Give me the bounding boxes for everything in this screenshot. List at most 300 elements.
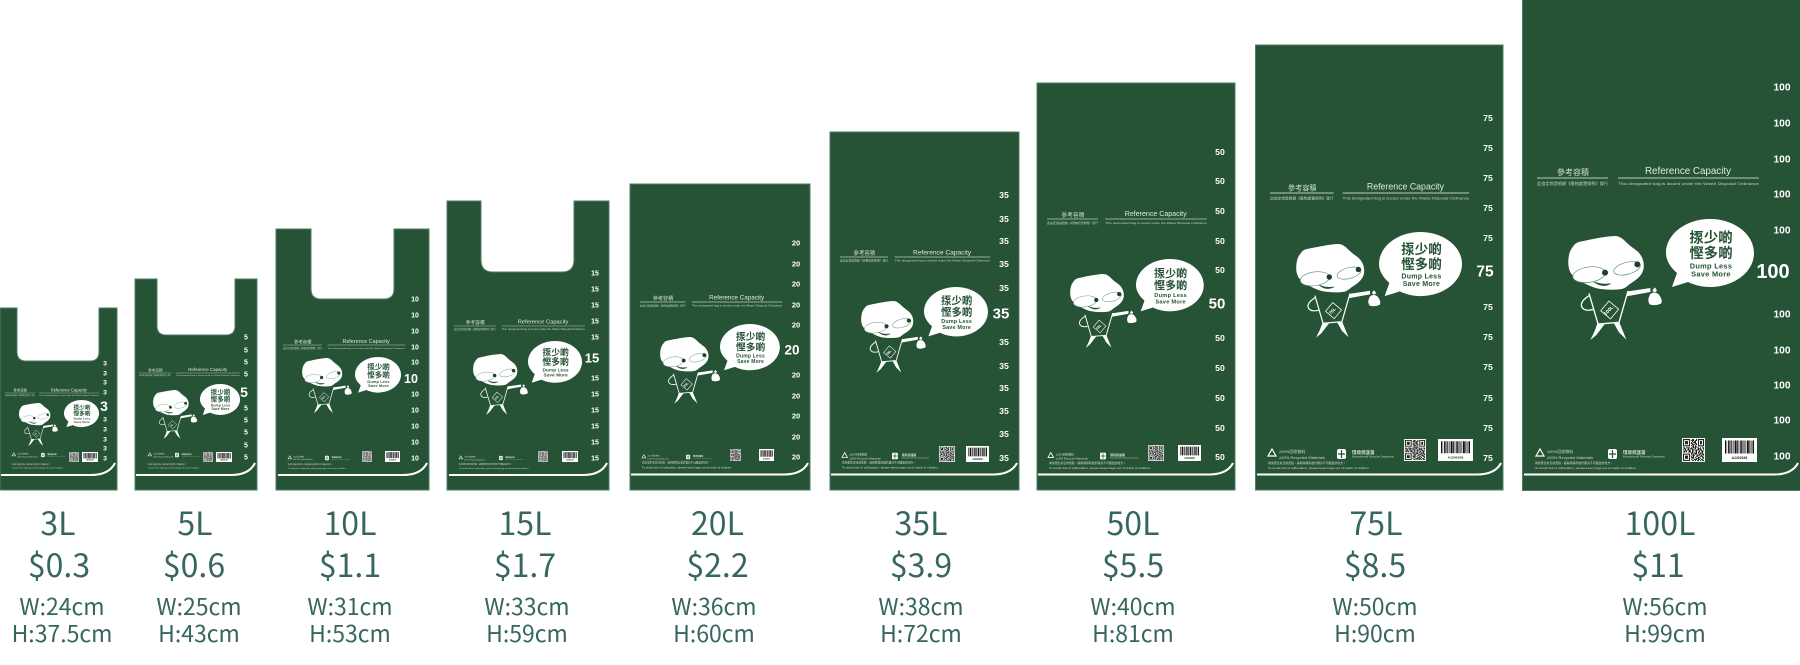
capacity numbers: 100 [1774,416,1791,426]
capacity numbers: 50 [1215,206,1225,216]
reference capacity heading [5,387,99,397]
recycled materials mark: ≥20%回收物料 [293,455,305,459]
recycled materials mark: ≥20%回收物料 [1056,452,1074,456]
speech bubble [1666,219,1754,287]
reference capacity heading: 此指定袋是根據《廢物處置條例》發行 [139,373,172,377]
reference capacity heading: 參考容積 [1288,183,1317,192]
barcode [1438,439,1473,461]
capacity numbers: 100 [1774,226,1791,236]
capacity numbers: 50 [1215,176,1225,186]
suffocation warning: 為免發生窒息的危險，請將膠袋存放於嬰兒不可觸及的地方。 [1268,460,1346,465]
recycled materials mark [288,455,313,461]
label: 20L size and price: 20L [691,499,744,545]
recycled materials mark: ≥20% Recycled Materials [849,456,881,460]
suffocation warning [288,462,347,470]
reference capacity heading: This designated bag is issued under the Waste Disposal Ordinance [1343,196,1469,200]
capacity numbers: 15 [591,334,599,342]
capacity numbers [404,296,419,462]
capacity numbers: 20 [792,452,800,462]
speech bubble: 慳多啲 [736,341,765,354]
capacity numbers: 15 [591,424,599,430]
barcode: A1202106 [1732,456,1747,460]
QR code [730,449,741,461]
QR code [362,451,372,462]
suffocation warning: To avoid risk of suffocation, please keep bags out of reach of children. [459,467,530,470]
bag body [830,132,1019,490]
label: 50L size and price: $5.5 [1102,541,1164,587]
EPD logo: 環境保護署 [1623,449,1646,456]
reference capacity heading: 參考容積 [653,295,673,302]
speech bubble [64,400,99,427]
reference capacity heading: 此指定袋是根據《廢物處置條例》發行 [1270,195,1334,200]
capacity numbers: 5 [244,454,248,462]
label: 10L size and price [307,499,393,649]
speech bubble: Save More [942,325,971,331]
capacity numbers: 10 [411,408,419,414]
barcode: A1202106 [389,459,396,462]
QR code [1682,438,1705,462]
barcode [1178,445,1201,461]
bottom curve [1,463,115,475]
panel: 15L bag [447,201,609,490]
bag body [0,308,117,490]
label: 10L size and price: H:53cm [309,615,391,649]
capacity numbers: 15 [591,318,599,326]
barcode: A1202106 [220,459,228,462]
capacity numbers: 35 [999,337,1009,347]
mascot character: 20L [683,381,689,388]
capacity numbers: 75 [1483,302,1493,312]
speech bubble: Save More [1403,281,1440,288]
capacity numbers: 100 [1774,346,1791,356]
recycled materials mark: ≥20% Recycled Materials [17,455,38,458]
mascot character [1070,274,1137,348]
EPD logo: Environmental Protection Department [1110,456,1139,459]
speech bubble: Dump Less [543,367,569,372]
label: 75L size and price: H:90cm [1334,615,1416,649]
speech bubble: 揼少啲 [1689,228,1733,246]
label: 15L size and price: 15L [499,499,551,545]
reference capacity heading [139,367,240,377]
speech bubble: 慳多啲 [1154,278,1187,292]
capacity numbers: 3 [103,426,107,434]
capacity numbers: 100 [1774,190,1791,200]
EPD logo: Environmental Protection Department [505,458,524,461]
speech bubble: Dump Less [211,404,230,408]
capacity numbers: 20 [792,432,800,442]
recycled materials mark [148,452,174,458]
suffocation warning: 為免發生窒息的危險，請將膠袋存放於嬰兒不可觸及的地方。 [459,462,513,466]
EPD logo: Environmental Protection Department [902,456,930,459]
capacity numbers: 75 [1483,423,1493,433]
reference capacity heading [454,319,586,331]
recycled materials mark: ≥20%回收物料 [153,452,165,456]
capacity numbers: 3 [103,416,107,424]
capacity numbers: 10 [411,456,419,462]
capacity numbers: 75 [1483,143,1493,153]
speech bubble: 揼少啲 [736,330,765,343]
bottom curve [1038,463,1233,474]
capacity numbers: 75 [1483,393,1493,403]
capacity numbers: 100 [1756,261,1790,283]
panel: 3L bag [0,308,117,490]
recycled materials mark [1268,448,1325,460]
capacity numbers: 20 [784,342,800,358]
reference capacity heading: 此指定袋是根據《廢物處置條例》發行 [5,394,35,397]
recycled materials mark: ≥20% Recycled Materials [153,455,174,458]
EPD logo: 環境保護署 [47,452,57,456]
suffocation warning: To avoid risk of suffocation, please keep bags out of reach of children. [642,466,732,470]
label: 50L size and price: H:81cm [1092,615,1174,649]
capacity numbers [1756,82,1791,462]
reference capacity heading: This designated bag is issued under the Waste Disposal Ordinance [502,328,586,331]
reference capacity heading: 參考容積 [13,388,28,393]
label: 20L size and price: $2.2 [686,541,749,587]
capacity numbers: 35 [999,453,1009,463]
label: 5L size and price: $0.6 [163,541,225,587]
label: 5L size and price: W:25cm [156,588,242,622]
suffocation warning: 為免發生窒息的危險，請將膠袋存放於嬰兒不可觸及的地方。 [1535,460,1613,465]
label: 20L size and price [671,499,757,649]
speech bubble [924,287,988,336]
label: 35L size and price: H:72cm [880,615,962,649]
recycled materials mark [459,455,485,461]
capacity numbers: 75 [1483,453,1493,463]
bag body [1037,83,1235,490]
recycled materials mark [12,452,38,458]
QR code [1148,445,1164,461]
capacity numbers: 10 [411,360,419,366]
mascot character [861,301,926,373]
reference capacity heading: Reference Capacity [188,367,228,372]
mascot character [19,403,58,446]
speech bubble [355,357,401,393]
reference capacity heading: Reference Capacity [518,320,569,326]
EPD logo: Environmental Protection Department [693,457,713,460]
capacity numbers: 75 [1483,362,1493,372]
label: 35L size and price: $3.9 [890,541,952,587]
label: 75L size and price [1332,499,1418,649]
reference capacity heading: This designated bag is issued under the Waste Disposal Ordinance [1618,181,1760,186]
panel: 35L bag [830,132,1019,490]
speech bubble: 慳多啲 [367,369,390,379]
speech bubble: Dump Less [73,417,91,421]
capacity numbers: 20 [792,412,800,420]
capacity numbers [784,238,800,462]
capacity numbers: 20 [792,300,800,310]
label: 3L size and price: H:37.5cm [12,615,112,649]
reference capacity heading: Reference Capacity [913,249,972,256]
capacity numbers [1476,113,1494,463]
label: 5L size and price: 5L [177,499,213,545]
bottom curve [1524,463,1798,474]
capacity numbers: 15 [591,440,599,446]
capacity numbers: 75 [1483,203,1493,213]
EPD logo: Environmental Protection Department [182,455,201,458]
capacity numbers [993,190,1009,463]
suffocation warning [842,460,939,470]
reference capacity heading [1270,181,1469,200]
barcode [1722,438,1757,462]
bag body [447,201,609,490]
mascot character: 75L [1328,306,1337,316]
panel: 20L bag [630,184,810,490]
capacity numbers: 15 [591,408,599,414]
capacity numbers [1209,147,1225,462]
recycled materials mark: ≥20% Recycled Materials [293,458,313,461]
EPD logo: Environmental Protection Department [1623,456,1665,459]
capacity numbers: 20 [792,260,800,268]
panel: 10L bag [276,229,429,490]
EPD logo: 環境保護署 [332,455,341,459]
barcode: A1202106 [566,459,574,462]
bag body [276,229,429,490]
barcode: A1202106 [1448,455,1464,459]
suffocation warning: 為免發生窒息的危險，請將膠袋存放於嬰兒不可觸及的地方。 [148,463,187,466]
recycled materials mark: ≥20%回收物料 [647,454,660,458]
speech bubble: 揼少啲 [542,346,569,357]
reference capacity heading: 參考容積 [1061,211,1085,219]
recycled materials mark: ≥20%回收物料 [17,452,29,456]
panel: 50L bag [1037,83,1235,490]
suffocation warning: To avoid risk of suffocation, please keep bags out of reach of children. [148,466,200,469]
EPD logo [686,454,713,460]
EPD logo: 環境保護署 [505,455,515,459]
capacity numbers: 50 [1215,236,1225,246]
label: 50L size and price [1090,499,1176,649]
reference capacity heading [283,338,406,350]
label: 20L size and price: W:36cm [671,588,757,622]
EPD logo [41,452,66,458]
reference capacity heading: 參考容積 [148,368,163,373]
speech bubble: Save More [1691,270,1731,278]
bottom curve [278,463,427,475]
speech bubble: 慳多啲 [211,395,231,404]
suffocation warning [12,463,64,469]
suffocation warning [1268,460,1370,470]
speech bubble: 慳多啲 [1401,256,1442,272]
label: 75L size and price: 75L [1350,499,1402,545]
capacity numbers: 100 [1774,154,1791,166]
panel: 100L bag [1522,0,1800,490]
suffocation warning: To avoid risk of suffocation, please keep bags out of reach of children. [12,466,64,469]
capacity numbers: 15 [591,270,599,278]
reference capacity heading: 此指定袋是根據《廢物處置條例》發行 [454,327,497,331]
speech bubble: 慳多啲 [73,410,91,418]
bottom curve [831,463,1017,474]
capacity numbers: 3 [103,390,107,396]
speech bubble: Save More [368,383,390,388]
suffocation warning: 為免發生窒息的危險，請將膠袋存放於嬰兒不可觸及的地方。 [1049,460,1126,465]
barcode [385,451,400,462]
recycled materials mark: ≥20%回收物料 [1547,448,1573,454]
capacity numbers: 75 [1483,332,1493,342]
capacity numbers: 100 [1774,310,1791,320]
speech bubble: Dump Less [1401,274,1441,281]
capacity numbers: 50 [1209,296,1225,312]
QR code [939,446,955,462]
label: 100L size and price: W:56cm [1622,588,1708,622]
EPD logo [499,455,524,461]
capacity numbers: 3 [103,370,107,378]
label: 10L size and price: $1.1 [319,541,381,587]
speech bubble: Dump Less [1690,262,1732,270]
label: 50L size and price: W:40cm [1090,588,1176,622]
capacity numbers: 100 [1774,118,1791,130]
barcode [562,451,578,462]
reference capacity heading: This designated bag is issued under the Waste Disposal Ordinance [39,394,99,397]
capacity numbers: 10 [404,372,418,386]
bag body [1256,45,1503,490]
QR code [69,452,79,462]
label: 15L size and price: W:33cm [484,588,570,622]
EPD logo [325,455,351,461]
label: 100L size and price: $11 [1631,541,1685,587]
QR code [1404,439,1426,461]
speech bubble [1379,232,1462,296]
capacity numbers: 35 [999,406,1009,416]
suffocation warning [642,460,732,470]
reference capacity heading: Reference Capacity [1645,166,1731,177]
reference capacity heading [1537,166,1760,186]
speech bubble: 慳多啲 [542,356,569,367]
capacity numbers: 50 [1215,147,1225,157]
capacity numbers: 35 [999,259,1009,269]
speech bubble [1136,259,1204,311]
capacity numbers: 35 [993,306,1009,322]
capacity numbers: 75 [1476,264,1494,280]
reference capacity heading: This designated bag is issued under the Waste Disposal Ordinance [895,259,991,263]
capacity numbers: 75 [1483,173,1493,183]
label: 100L size and price [1622,499,1708,649]
label: 15L size and price: $1.7 [494,541,556,587]
suffocation warning: To avoid risk of suffocation, please keep bags out of reach of children. [842,466,939,470]
capacity numbers: 50 [1215,423,1225,433]
reference capacity heading: This designated bag is issued under the Waste Disposal Ordinance [328,347,406,350]
speech bubble [720,324,780,370]
recycled materials mark: ≥20% Recycled Materials [1279,455,1325,460]
capacity numbers: 5 [244,372,248,378]
capacity numbers: 10 [411,296,419,304]
label: 10L size and price: W:31cm [307,588,393,622]
EPD logo: 環境保護署 [1352,449,1375,456]
reference capacity heading: 此指定袋是根據《廢物處置條例》發行 [640,303,686,307]
capacity numbers: 100 [1774,452,1791,462]
capacity numbers: 50 [1215,363,1225,373]
recycled materials mark [1536,448,1593,460]
mascot character [153,390,197,439]
capacity numbers: 15 [591,302,599,310]
label: 3L size and price: 3L [40,499,76,545]
EPD logo [892,452,930,459]
EPD logo: 環境保護署 [1110,452,1125,457]
capacity numbers: 35 [999,429,1009,439]
capacity numbers: 75 [1483,113,1493,123]
label: 75L size and price: W:50cm [1332,588,1418,622]
recycled materials mark: ≥20%回收物料 [464,455,476,459]
EPD logo: Environmental Protection Department [1352,456,1394,459]
capacity numbers: 5 [244,348,248,354]
capacity numbers [100,360,108,462]
EPD logo [1337,449,1394,459]
capacity numbers: 10 [411,344,419,352]
reference capacity heading: 此指定袋是根據《廢物處置條例》發行 [1047,220,1098,225]
capacity numbers: 20 [792,280,800,288]
mascot character [473,354,528,415]
suffocation warning: 為免發生窒息的危險，請將膠袋存放於嬰兒不可觸及的地方。 [12,463,51,466]
suffocation warning: 為免發生窒息的危險，請將膠袋存放於嬰兒不可觸及的地方。 [842,460,916,464]
capacity numbers: 3 [103,380,107,386]
bag body [630,184,810,490]
panel: 75L bag [1256,45,1503,490]
label: 100L size and price: 100L [1625,499,1695,545]
capacity numbers: 100 [1774,380,1791,392]
label: 10L size and price: 10L [324,499,376,545]
capacity numbers: 35 [999,214,1009,224]
reference capacity heading: Reference Capacity [1367,181,1445,191]
suffocation warning: To avoid risk of suffocation, please keep bags out of reach of children. [1049,466,1151,470]
label: 15L size and price [484,499,570,649]
capacity numbers: 20 [792,320,800,330]
mascot character [1296,244,1380,338]
panel: 5L bag [135,279,257,490]
speech bubble: 慳多啲 [941,305,972,318]
label: 3L size and price: W:24cm [19,588,105,622]
mascot character: 5L [171,423,175,427]
mascot character: 35L [886,349,893,356]
barcode [216,452,232,462]
mascot character: 10L [320,394,327,400]
speech bubble: Save More [543,372,568,377]
capacity numbers: 3 [103,436,107,444]
speech bubble: Save More [1155,299,1186,305]
capacity numbers: 5 [244,418,248,424]
capacity numbers: 10 [411,392,419,398]
suffocation warning: To avoid risk of suffocation, please keep bags out of reach of children. [1535,466,1637,470]
capacity numbers: 20 [792,392,800,400]
capacity numbers: 35 [999,190,1009,200]
speech bubble: Dump Less [367,379,390,384]
QR code [538,451,548,462]
EPD logo [1100,452,1139,459]
capacity numbers: 10 [411,312,419,320]
reference capacity heading [840,249,991,263]
recycled materials mark [842,452,881,460]
label: 75L size and price: $8.5 [1344,541,1406,587]
capacity numbers: 15 [591,392,599,398]
barcode: A1202106 [1184,457,1195,460]
reference capacity heading: 參考容積 [1557,167,1589,177]
capacity numbers [585,270,599,462]
reference capacity heading: This designated bag is issued under the Waste Disposal Ordinance [692,303,783,307]
capacity numbers: 5 [244,442,248,450]
reference capacity heading: 此指定袋是根據《廢物處置條例》發行 [283,346,323,350]
label: 3L size and price [12,499,112,649]
label: 50L size and price: 50L [1107,499,1159,545]
suffocation warning: 為免發生窒息的危險，請將膠袋存放於嬰兒不可觸及的地方。 [642,460,711,464]
speech bubble: 揼少啲 [941,294,972,307]
mascot character [660,337,720,404]
speech bubble [200,384,240,415]
label: 5L size and price [156,499,242,649]
capacity numbers: 10 [411,328,419,336]
label: 5L size and price: H:43cm [158,615,240,649]
capacity numbers: 50 [1215,452,1225,462]
suffocation warning: To avoid risk of suffocation, please keep bags out of reach of children. [1268,466,1370,470]
reference capacity heading: This designated bag is issued under the Waste Disposal Ordinance [1105,221,1207,225]
capacity numbers: 35 [999,361,1009,371]
speech bubble: 揼少啲 [1401,241,1442,257]
